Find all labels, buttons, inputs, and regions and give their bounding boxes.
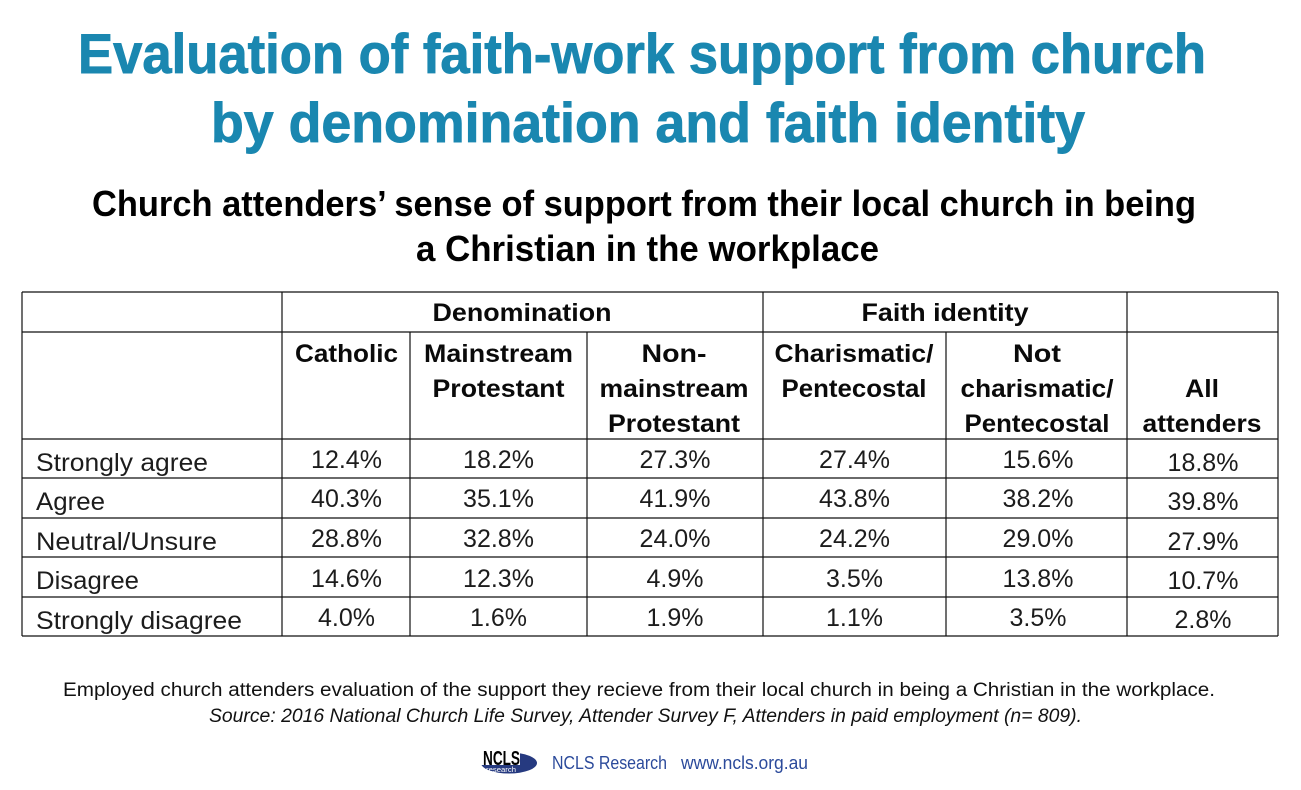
data: Catholic: 4.0% [318,604,375,632]
group headers [432,299,1029,327]
row labels: Neutral/Unsure [36,528,217,556]
caption: Source: 2016 National Church Life Survey, Attender Survey F, Attenders in paid employment (n= 809). [209,706,1082,727]
row labels: Strongly agree [36,449,208,477]
column headers: Charismatic/ [774,340,934,368]
data: Not charismatic/Pentecostal [1003,446,1073,632]
data: Non-mainstream Protestant: 41.9% [640,485,710,513]
data: Mainstream Protestant: 18.2% [463,446,534,474]
column headers: Not [1013,340,1062,368]
data: Non-mainstream Protestant: 24.0% [640,525,710,553]
data: Catholic [311,446,382,632]
column headers: Pentecostal [782,375,926,403]
column headers [295,340,1262,438]
data: Charismatic/Pentecostal [819,446,890,632]
data: Mainstream Protestant: 35.1% [463,485,534,513]
footer text: NCLS Research [552,753,667,773]
footer text [552,753,808,773]
data: Not charismatic/Pentecostal: 3.5% [1010,604,1066,632]
data: All attenders: 2.8% [1175,606,1231,634]
data: Non-mainstream Protestant: 27.3% [640,446,710,474]
data: Charismatic/Pentecostal: 24.2% [819,525,890,553]
column headers: attenders [1142,410,1262,438]
data: Charismatic/Pentecostal: 43.8% [819,485,890,513]
data: Not charismatic/Pentecostal: 38.2% [1003,485,1073,513]
data: Non-mainstream Protestant [640,446,710,632]
group headers: Denomination [432,299,612,327]
column headers: Non- [642,340,706,368]
subtitle: Church attenders’ sense of support from their local church in being [92,183,1196,224]
data: Catholic: 40.3% [311,485,382,513]
logo: NCLS: research [486,767,516,774]
data: All attenders: 10.7% [1168,567,1238,595]
data: Mainstream Protestant: 32.8% [463,525,534,553]
logo: NCLS: NCLS [483,748,520,770]
data: Charismatic/Pentecostal: 3.5% [826,565,883,593]
column headers: All [1185,375,1219,403]
table [22,292,1278,636]
data: Not charismatic/Pentecostal: 15.6% [1003,446,1073,474]
title: by denomination and faith identity [211,91,1085,154]
footer text: www.ncls.org.au [680,753,808,773]
column headers: Mainstream [424,340,573,368]
column headers: charismatic/ [960,375,1114,403]
row labels: Agree [36,488,105,516]
column headers: Protestant [608,410,741,438]
data: Non-mainstream Protestant: 1.9% [647,604,703,632]
title: Evaluation of faith-work support from church [78,22,1206,85]
caption: Employed church attenders evaluation of the support they recieve from their local church in being a Christian in the workplace. [63,680,1215,701]
group headers: Faith identity [862,299,1029,327]
data: Mainstream Protestant: 12.3% [463,565,534,593]
data: All attenders [1168,449,1238,634]
caption [63,680,1215,727]
data: Mainstream Protestant: 1.6% [470,604,527,632]
row labels: Strongly disagree [36,607,242,635]
column headers: Pentecostal [964,410,1110,438]
data: Non-mainstream Protestant: 4.9% [647,565,703,593]
column headers: mainstream [600,375,748,403]
column headers: Protestant [432,375,565,403]
data: Mainstream Protestant [463,446,534,632]
data: All attenders: 27.9% [1168,528,1238,556]
subtitle: a Christian in the workplace [416,228,879,269]
data: Catholic: 28.8% [311,525,382,553]
table grid [22,292,1278,636]
title [78,22,1206,154]
subtitle [92,183,1196,269]
row labels [36,449,242,635]
data: Not charismatic/Pentecostal: 13.8% [1003,565,1073,593]
data: Catholic: 14.6% [311,565,382,593]
data: Charismatic/Pentecostal: 1.1% [826,604,883,632]
data: All attenders: 18.8% [1168,449,1238,477]
data: Charismatic/Pentecostal: 27.4% [819,446,890,474]
row labels: Disagree [36,567,139,595]
data: Not charismatic/Pentecostal: 29.0% [1003,525,1073,553]
data: All attenders: 39.8% [1168,488,1238,516]
data: Catholic: 12.4% [311,446,382,474]
column headers: Catholic [295,340,398,368]
